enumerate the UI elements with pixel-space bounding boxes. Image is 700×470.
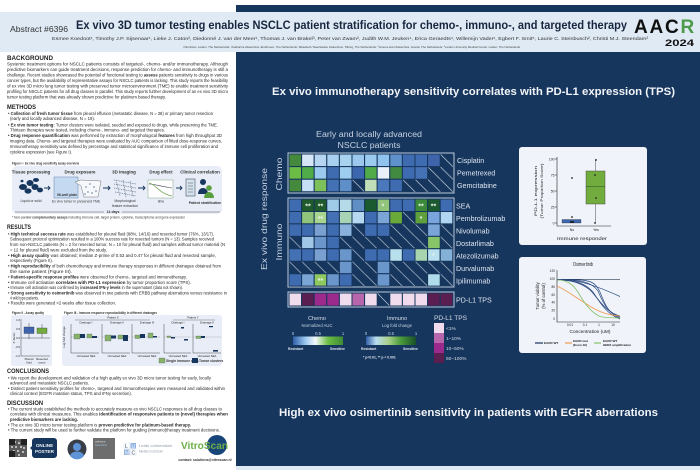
text: results: Subsequent protocol optimization resulted in a 100% success rate for resected tumors (N = 13). Samples received [10,236,215,242]
text: methods: • Collection of fresh tumor tissue from pleural effusion (metastatic disease, N = 38) or primary tumor resection [8,111,214,116]
legend: chemo: Normalized AUC [302,323,332,328]
text: background: profiling for NSCLC patients for all drug classes in parallel. This study reports further development of an ex vivo 3D micro [7,89,229,94]
figure III: reproducibility: Untreated SEA [198,354,216,358]
text: methods: cytokine expression (see Figure I). [10,150,72,154]
chart: PD-L1 boxplot: No [570,228,574,232]
legend: immuno: Log fold change [382,323,413,328]
arrow [138,186,145,190]
figure II: assay quality [11,311,52,366]
figure II: assay quality: Z'-factor [12,333,16,343]
text: methods: Immunotherapy sensitivity was defined by percentage and statistical significance of immune cell proliferation and [10,144,219,149]
logo: AACR 2024 [634,17,695,49]
text: discussion: • The ex vivo 3D micro tumor testing platform is proven predictive for platinum-based therapy. [8,422,191,428]
text: discussion: • The current study established the methods to accurately measure ex vivo NSCLC responses to all drug classes to [8,406,223,412]
significance stars: ** [318,204,323,210]
text: methods: • Ex vivo tumor testing: Tumor clusters were isolated, seeded and exposed to drugs, while preserving the TME. [8,122,218,128]
significance stars: ** [431,204,436,210]
text: methods: imaging data. Chemo- and targeted therapies were evaluated by AUC comparison of fitted dose-response curves. [10,138,222,144]
step: tissue processing [12,170,51,203]
chart: osimertinib dose response: 0.01 [567,323,573,327]
logo: LUMC: Leids Universitair [139,444,173,448]
chart: PD-L1 boxplot [519,147,647,245]
text: results: • Results were generated <2 weeks after tissue collection. [8,301,116,306]
legend: PD-L1 TPS [434,315,467,363]
text: conclusions [7,368,226,396]
text: results: = 12 for pleural fluid) were excluded from the study. [10,247,107,252]
figure III: reproducibility: Untreated SEA [169,354,187,358]
logo: VitroScan: contact: solutions@vitroscan.nl [178,458,232,462]
step: drug effect: Drug effect [149,170,173,174]
chart: osimertinib dose response: 20 [551,308,555,312]
figure III: reproducibility: Untreated SEA [108,354,126,358]
chart: osimertinib dose response: 60 [551,293,555,297]
row labels: Pemetrexed [457,170,495,178]
step: drug exposure: Ex vivo tumor in preserved TME [52,200,101,204]
text: conclusions: • Distinct patient sensitivity profiles for chemo-, targeted and immunotherapies were measured and validated within [8,386,226,391]
text: results: • High reproducibility of both chemotherapy and immune therapy responses in different drainages obtained from [8,264,221,268]
row labels: Atezolizumab [456,252,499,260]
figure III: reproducibility: Figure III - Immune response reproducibility in different drainages [64,311,157,315]
text: background: BACKGROUND [7,55,53,62]
figure I: assay overview: Figure I - Ex vivo drug sensitivity assay overview [12,162,79,166]
text: results: • High assay quality was obtained; median Z-prime of 0.53 and 0.47 for pleural fluid and resected sample, [8,253,216,258]
text: methods: (early and locally advanced disease, N = 19). [10,116,95,121]
figure II: assay quality: -0.5 [15,345,20,349]
bottom band [236,466,700,470]
legend: PD-L1 TPS: 1−10% [446,336,462,342]
chart: PD-L1 boxplot: Immune responder [557,236,607,242]
legend: immuno: 0 [365,331,368,336]
significance stars: * [432,253,435,260]
legend: curves [535,339,631,347]
figure III: reproducibility: Drainage II [200,320,214,324]
logos row [9,435,232,462]
chart: PD-L1 boxplot: 25 [551,205,555,209]
figure III: reproducibility: Untreated SEA [138,354,156,358]
step: 3D imaging [112,170,138,208]
legend: immuno: Sensitive [403,347,418,351]
text: background: cancer types, but the availability of representative assays for NSCLC patients is lacking. This study reports the feasibility [7,78,229,83]
chart: PD-L1 boxplot: 75 [551,173,555,177]
arrow [44,186,50,190]
row labels: SEA [456,202,470,210]
legend: immuno: Immuno [387,316,407,322]
text: results: • Strong sensitivity to osimertinib was observed in two patients with ERBB pathway aberrations versus resistance in [8,290,228,295]
text: background: tumor testing platform that was already shown predictive for platinum based therapy. [7,94,166,99]
text: background: Systemic treatment options for NSCLC patients consists of targeted-, chemo- and/or immunotherapy. Although [7,62,229,66]
chart: osimertinib dose response: 0 [553,317,555,321]
figure II: assay quality: Resected [36,357,48,361]
row labels: PD-L1 TPS [456,296,492,304]
significance stars: ** [318,278,323,285]
row labels: Cisplatin [457,157,484,165]
heatmap title [316,130,422,150]
figure I: assay overview [12,162,222,220]
legend: immuno: Resistant [361,347,377,351]
chart: PD-L1 boxplot: Yes [593,228,599,232]
legend: chemo: Resistant [288,347,304,351]
QR code [9,439,27,457]
step: drug exposure: Drug exposure [64,170,96,174]
top navy strip [236,5,700,12]
text: methods: • Drug response quantification was performed by extraction of morphological features from high throughput 3D [8,133,222,138]
step: tissue processing: Tissue processing [12,170,51,174]
text: results: 4 wild type patients. [10,296,39,300]
significance stars: * [382,204,385,210]
logo: catharina: ziekenhuis [95,444,108,447]
row labels: Durvalumab [456,265,494,273]
legend: immuno: 1 [415,331,418,336]
legend: PD-L1 TPS: PD-L1 TPS [434,315,467,322]
text: conclusions: • We report the development and validation of a high quality ex vivo 3D micro tumor testing for early, locally [8,376,212,380]
text: results: respectively (Figure II). [10,258,53,263]
chart: PD-L1 boxplot: (Tumor Proportion Score) [539,163,544,218]
chart: osimertinib dose response: 100 [550,277,555,281]
significance stars: ** [318,216,323,223]
figure III: reproducibility: Patient X [107,316,119,320]
chart: osimertinib dose response: (% of control) [541,283,546,309]
online poster badge: POSTER [35,449,55,454]
row labels: Nivolumab [456,228,490,236]
text: background: predictive biomarkers can guide treatment decisions, response prediction for chemo- and immunotherapy is still a [7,67,229,72]
text: conclusions: advanced and metastatic NSCLC patients. [10,380,89,386]
logo: catharina [93,438,115,459]
chart: osimertinib dose response: Tumor viability [535,281,540,310]
chart: osimertinib dose response: Osimertinib [573,262,593,268]
logo: AACR 2024: 2024 [665,38,695,49]
step: clinical correlation: Clinical correlation [180,170,220,174]
logo: LUMC: L [125,444,128,450]
figure III: reproducibility: Drainage I [172,320,185,324]
significance stars: ** [418,204,424,210]
logo: LUMC: C [132,450,136,456]
text: results: • Immune cell activation was confirmed by increased IFN-γ levels in the supernatant (data not shown). [8,285,183,290]
significance stars: ** [305,204,311,210]
axis label: chemo: Chemo [274,157,284,190]
step: clinical correlation: Patient stratification [189,201,221,205]
significance stars: * [420,216,423,223]
figure III: reproducibility: Log fold change [62,326,66,348]
online poster badge [30,438,57,458]
legend: chemo: Chemo [308,316,326,322]
legend: chemo: 0.5 [315,331,322,336]
presenter photo [68,440,86,459]
significance stars [305,204,436,285]
text: methods: Thirteen therapies were tested, including chemo-, immuno- and targeted therapies. [10,128,165,132]
logo: VitroScan [178,435,232,462]
figure II: assay quality: tumor [38,360,46,364]
legend: chemo: 0 [292,331,295,336]
legend: Tumor clusters [199,359,223,363]
legend: chemo: 1 [342,331,345,336]
chart: osimertinib dose response: Concentration (uM) [570,329,611,334]
step: drug exposure [52,170,101,204]
figure III: reproducibility: Drainage II [110,320,124,324]
figure II: assay quality: fluid [26,360,32,364]
legend: PD-L1 TPS: 10−50% [446,346,464,352]
step: drug effect: time [158,200,164,204]
legend: curves: EGFR WT [544,341,558,345]
logo: VitroScan: VitroScan [181,440,228,452]
text: discussion [7,400,228,432]
legend: chemo: Sensitive [330,347,345,351]
text: conclusions: clinical context (EGFR mutation status, TPS and IFNγ secretion). [10,391,132,396]
headline: immunotherapy: Ex vivo immunotherapy sensitivity correlates with PD-L1 expression (TPS) [272,86,675,98]
abstract number: Abstract #6396 [10,25,69,34]
box: yes responder [586,159,605,224]
text: results: RESULTS [7,224,31,231]
step: tissue processing: Liquid or solid [21,199,42,203]
heatmap: immuno [288,198,454,287]
chart: PD-L1 boxplot: PD-L1 expression [533,166,538,216]
curves: EGFR WT [557,279,620,319]
chart: osimertinib dose response: 0.1 [583,323,587,327]
row labels [456,157,505,304]
chart: osimertinib dose response: 80 [551,285,555,289]
legend: immuno [361,316,418,360]
chart: osimertinib dose response: 40 [551,300,555,304]
arrow [176,186,182,190]
step: 3D imaging: feature extraction [112,204,138,208]
figure III: reproducibility: Drainage I [80,320,93,324]
chart: PD-L1 boxplot: 50 [551,189,555,193]
online poster badge: ONLINE [36,443,53,448]
curve: EGFR mut [557,286,620,316]
legend: chemo [288,316,345,351]
text: discussion: predictive biomarkers are lacking. [10,417,78,422]
row labels: Dostarlimab [456,240,494,248]
logo: LUMC: Medisch Centrum [139,450,163,454]
figure II: assay quality: 0.5 [16,327,20,331]
legend: curves: HER2 amplification [603,343,631,347]
figure II: assay quality: Pleural [25,357,34,361]
text: results: • High technical success rate was established for pleural fluid (88%, 14/16) and resected tumor (76%, 13/17). [8,232,214,236]
text: discussion: • The current study will be used to further validate the platform for guiding (immuno)therapy treatment decisions. [8,428,220,432]
legend: curves: (Exon 19) [573,343,587,347]
figure II: assay quality: 0.0 [16,336,20,340]
row labels: Ipilimumab [456,278,490,286]
legend: curves: EGFR WT [603,339,617,343]
heatmap title: NSCLC patients [338,141,400,150]
text: background: challenge. Recent studies showcased the potential of functional testing to assess patients sensitivity to drugs in various [7,72,228,78]
text: results: the same patient (Figure III). [10,269,72,274]
text: discussion: DISCUSSION [7,400,43,407]
affiliations: ¹VitroScan, Leiden, The Netherlands; ²Catharina Ziekenhuis, Eindhoven, The Netherlands; ³Elisabeth-TweeSteden Ziekenhuis, Tilburg, The Netherlands; ⁴Groene Hart Ziekenhuis, Gouda, The Netherlands; ⁵Leiden University Medical Center, Leiden, The Netherlands [183,45,521,49]
header band [0,12,700,52]
heatmap: PD-L1 TPS row [288,292,454,307]
logo: LUMC: M [125,450,129,456]
authors: Esmee Koedoot¹, Timothy J.P. Sijsenaar¹, Lieke J. Caton², Diedonné J. van der Meer¹, Thomas J. van Brakel³, Peter van Zwam², Judith W.M. Jeuken⁴, Erica Geraedts⁴, Willemijn Vader¹, Egbert F. Smit⁵, Laurie C. Steinbusch², Christi M.J. Steendam² [52,36,648,42]
text: background [7,55,229,99]
legend: immuno: 0.5 [388,331,395,336]
logo: AACR 2024: AACR [634,17,694,38]
chart: osimertinib dose response: 120 [550,269,555,273]
step: 3D imaging: Morphological [114,199,136,203]
curve: HER2 [557,280,620,318]
footnote: * Non-parallel complementary assays including immune cell, target protein, cytokine, transcriptome and gene expression [12,216,185,220]
logo: catharina: catharina [95,440,106,444]
figure II: assay quality: 1.0 [16,318,20,322]
legend: PD-L1 TPS: <1% [446,326,456,332]
timeline: 14 days [107,210,119,214]
legend [159,358,223,363]
legend: PD-L1 TPS: 50−100% [446,356,467,362]
text: results [7,224,228,306]
step: drug effect [148,170,173,204]
title: Ex vivo 3D tumor testing enables NSCLC patient stratification for chemo-, immuno-, and targeted therapy [76,20,628,32]
heatmap: chemo [288,153,454,193]
step: 3D imaging: 3D imaging [112,170,136,174]
row labels: Gemcitabine [457,182,497,190]
text: background: of ex vivo 3D micro lung tumor testing with preserved tumor microenvironment (TME) to enable treatment sensitivity [7,84,229,88]
axis label: ex vivo drug response: Ex vivo drug response [259,168,269,270]
text: conclusions: CONCLUSIONS [7,368,49,375]
logo: LUMC [124,443,173,456]
text: methods [7,104,222,154]
chart: osimertinib dose response [519,257,646,353]
row labels: Pembrolizumab [456,215,505,223]
panel: key results navy [236,52,700,466]
text: results: • Immune cell activation correlates with PD-L1 expression by tumor proportion score (TPS). [8,280,191,285]
legend: curves: EGFR mut [573,339,588,343]
figure III: reproducibility: Untreated SEA [77,354,95,358]
step: clinical correlation [180,170,221,205]
step: drug exposure: 96-well plate [57,193,77,197]
headline: osimertinib: High ex vivo osimertinib sensitivity in patients with EGFR aberrations [279,407,658,419]
figure III: reproducibility: Patient Y [187,316,199,320]
box: no responder [562,177,581,223]
legend: Single immune cells [166,359,199,363]
legend: immuno: * p<0.01, ** p < 0.001 [363,356,396,360]
axis label: immuno: Immuno [274,223,284,260]
text: results: from non-NSCLC patients (N = 2 for resected tumor, N = 10 for pleural fluid) and samples without tumor material (N [10,242,225,247]
figure III: reproducibility: Drainage III [140,320,154,324]
figure III: reproducibility [62,311,223,366]
figure II: assay quality: -1.0 [15,354,20,358]
heatmap title: Early and locally advanced [316,130,422,139]
text: results: • Patient-specific response profiles were observed for chemo-, targeted and immunotherapy. [8,275,187,280]
arrow [103,186,110,190]
chart: osimertinib dose response: 10 [611,323,615,327]
logo: LUMC: U [132,444,136,450]
chart: osimertinib dose response: 1 [598,323,600,327]
text: discussion: correlate with clinical measures. This enables identification of responsive patients to (novel) therapies when [10,412,228,416]
figure II: assay quality: Figure II - Assay quality [12,311,44,315]
text: methods: METHODS [7,104,36,111]
chart: PD-L1 boxplot: 0 [553,221,555,225]
chart: PD-L1 boxplot: 100 [549,157,555,161]
